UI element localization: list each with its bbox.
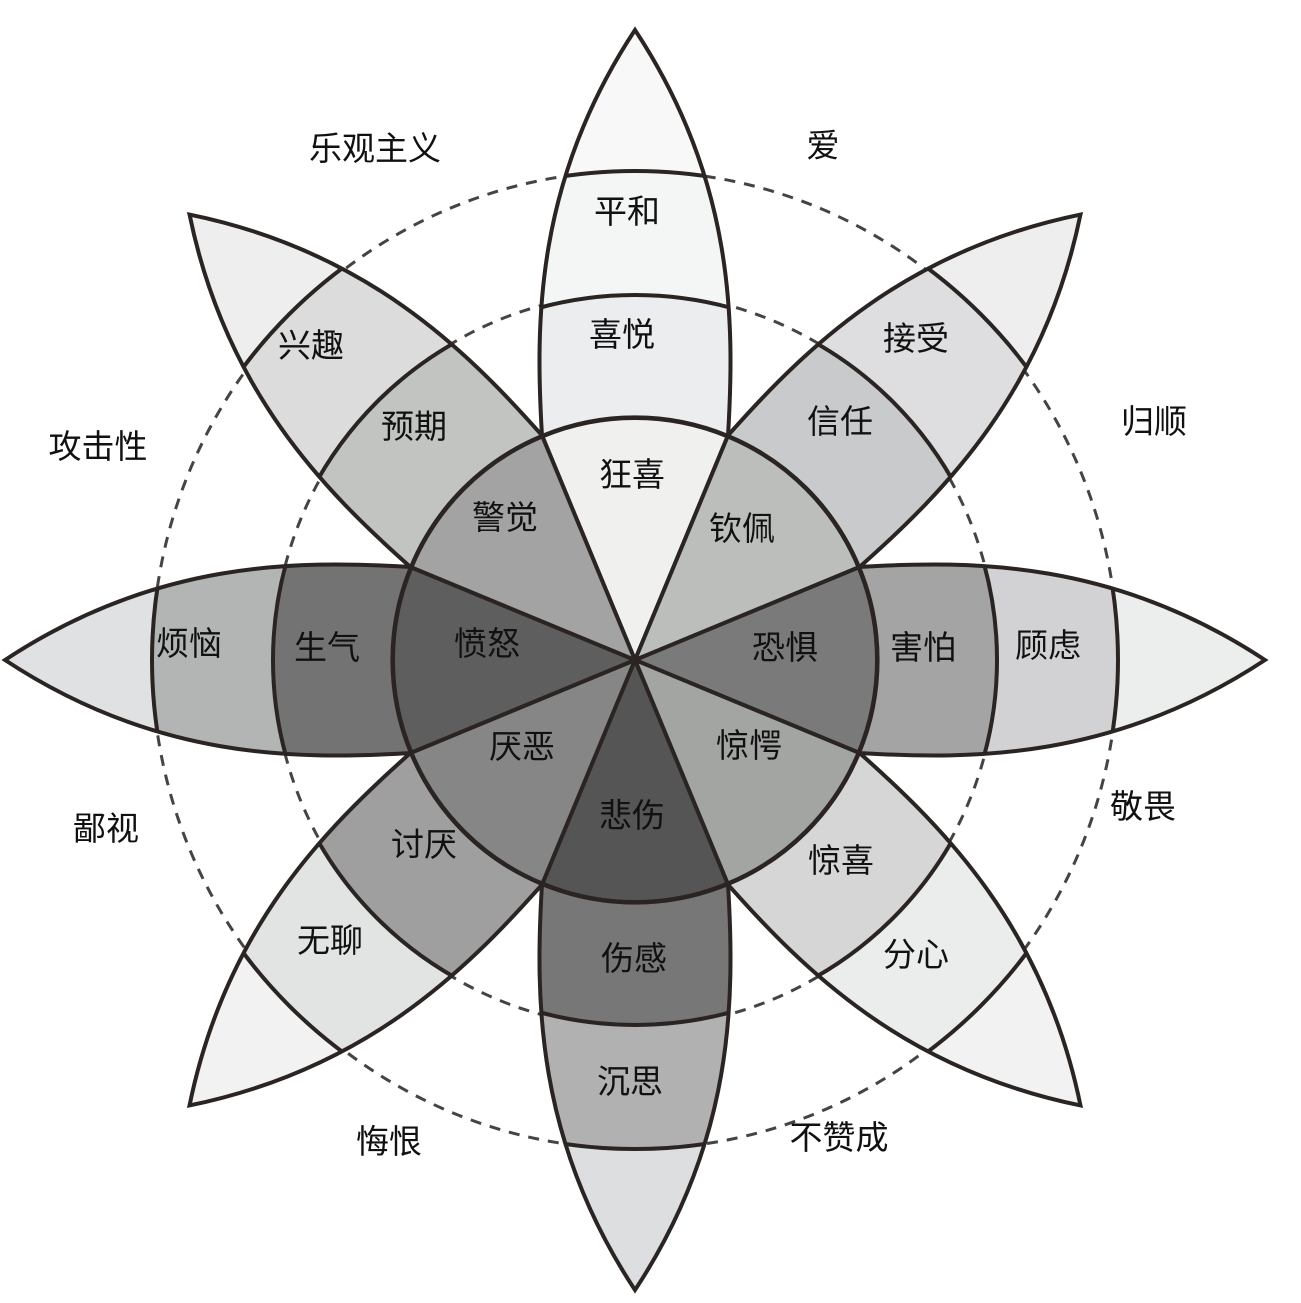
emotion labels inside petals: 兴趣 (278, 327, 344, 364)
petal: disgust (bottom left) (187, 755, 540, 1108)
combination labels outside wheel: 鄙视 (73, 810, 139, 847)
emotion labels inside petals: 悲伤 (599, 797, 665, 834)
petal: fear (right) (861, 562, 1268, 758)
dashed intensity circles (152, 171, 1118, 1149)
inner wedge: ecstasy (542, 418, 728, 660)
emotion labels inside petals: 恐惧 (752, 629, 818, 666)
emotion labels inside petals: 接受 (883, 320, 949, 357)
inner wedge: loathing (398, 595, 700, 897)
emotion labels inside petals: 惊愕 (716, 727, 782, 764)
petal: anger (left) (2, 562, 409, 758)
emotion labels inside petals: 钦佩 (709, 510, 775, 547)
emotion labels inside petals: 分心 (883, 936, 949, 973)
inner wedge: terror (635, 567, 877, 753)
emotion labels inside petals: 无聊 (297, 922, 363, 959)
combination labels outside wheel: 归顺 (1121, 403, 1187, 440)
combination labels outside wheel: 攻击性 (48, 428, 148, 465)
combination labels outside wheel (48, 127, 1187, 1160)
emotion labels inside petals: 烦恼 (156, 625, 222, 662)
combination labels outside wheel: 敬畏 (1110, 788, 1176, 825)
emotion labels inside petals: 顾虑 (1015, 627, 1081, 664)
petal: trust (top right) (730, 212, 1083, 565)
emotion labels inside petals: 害怕 (890, 629, 956, 666)
emotion labels inside petals: 沉思 (597, 1063, 663, 1100)
inner wedge: vigilance (398, 423, 700, 725)
emotion labels inside petals: 伤感 (601, 940, 667, 977)
inner wedge: amazement (570, 595, 872, 897)
inner wedge: admiration (570, 423, 872, 725)
combination labels outside wheel: 悔恨 (356, 1123, 422, 1160)
emotion labels inside petals: 惊喜 (808, 842, 874, 879)
emotion labels inside petals: 信任 (807, 403, 873, 440)
combination labels outside wheel: 爱 (806, 127, 840, 164)
petal: anticipation (top left) (187, 212, 540, 565)
emotion labels inside petals: 愤怒 (454, 625, 520, 662)
petal: sadness (bottom) (538, 886, 732, 1294)
petal: surprise (bottom right) (730, 755, 1083, 1108)
combination labels outside wheel: 乐观主义 (309, 130, 441, 167)
combination labels outside wheel: 不赞成 (790, 1119, 888, 1156)
petal: joy (top) (538, 26, 732, 434)
emotion labels inside petals: 平和 (594, 193, 660, 230)
emotion labels inside petals: 狂喜 (599, 456, 665, 493)
emotion labels inside petals (156, 193, 1081, 1100)
inner wedge: grief (542, 660, 728, 902)
inner wedge: rage (393, 567, 635, 753)
emotion labels inside petals: 警觉 (472, 499, 538, 536)
emotion labels inside petals: 预期 (381, 408, 447, 445)
emotion labels inside petals: 生气 (294, 629, 360, 666)
emotion labels inside petals: 讨厌 (391, 826, 457, 863)
emotion labels inside petals: 厌恶 (489, 728, 555, 765)
emotion labels inside petals: 喜悦 (589, 316, 655, 353)
